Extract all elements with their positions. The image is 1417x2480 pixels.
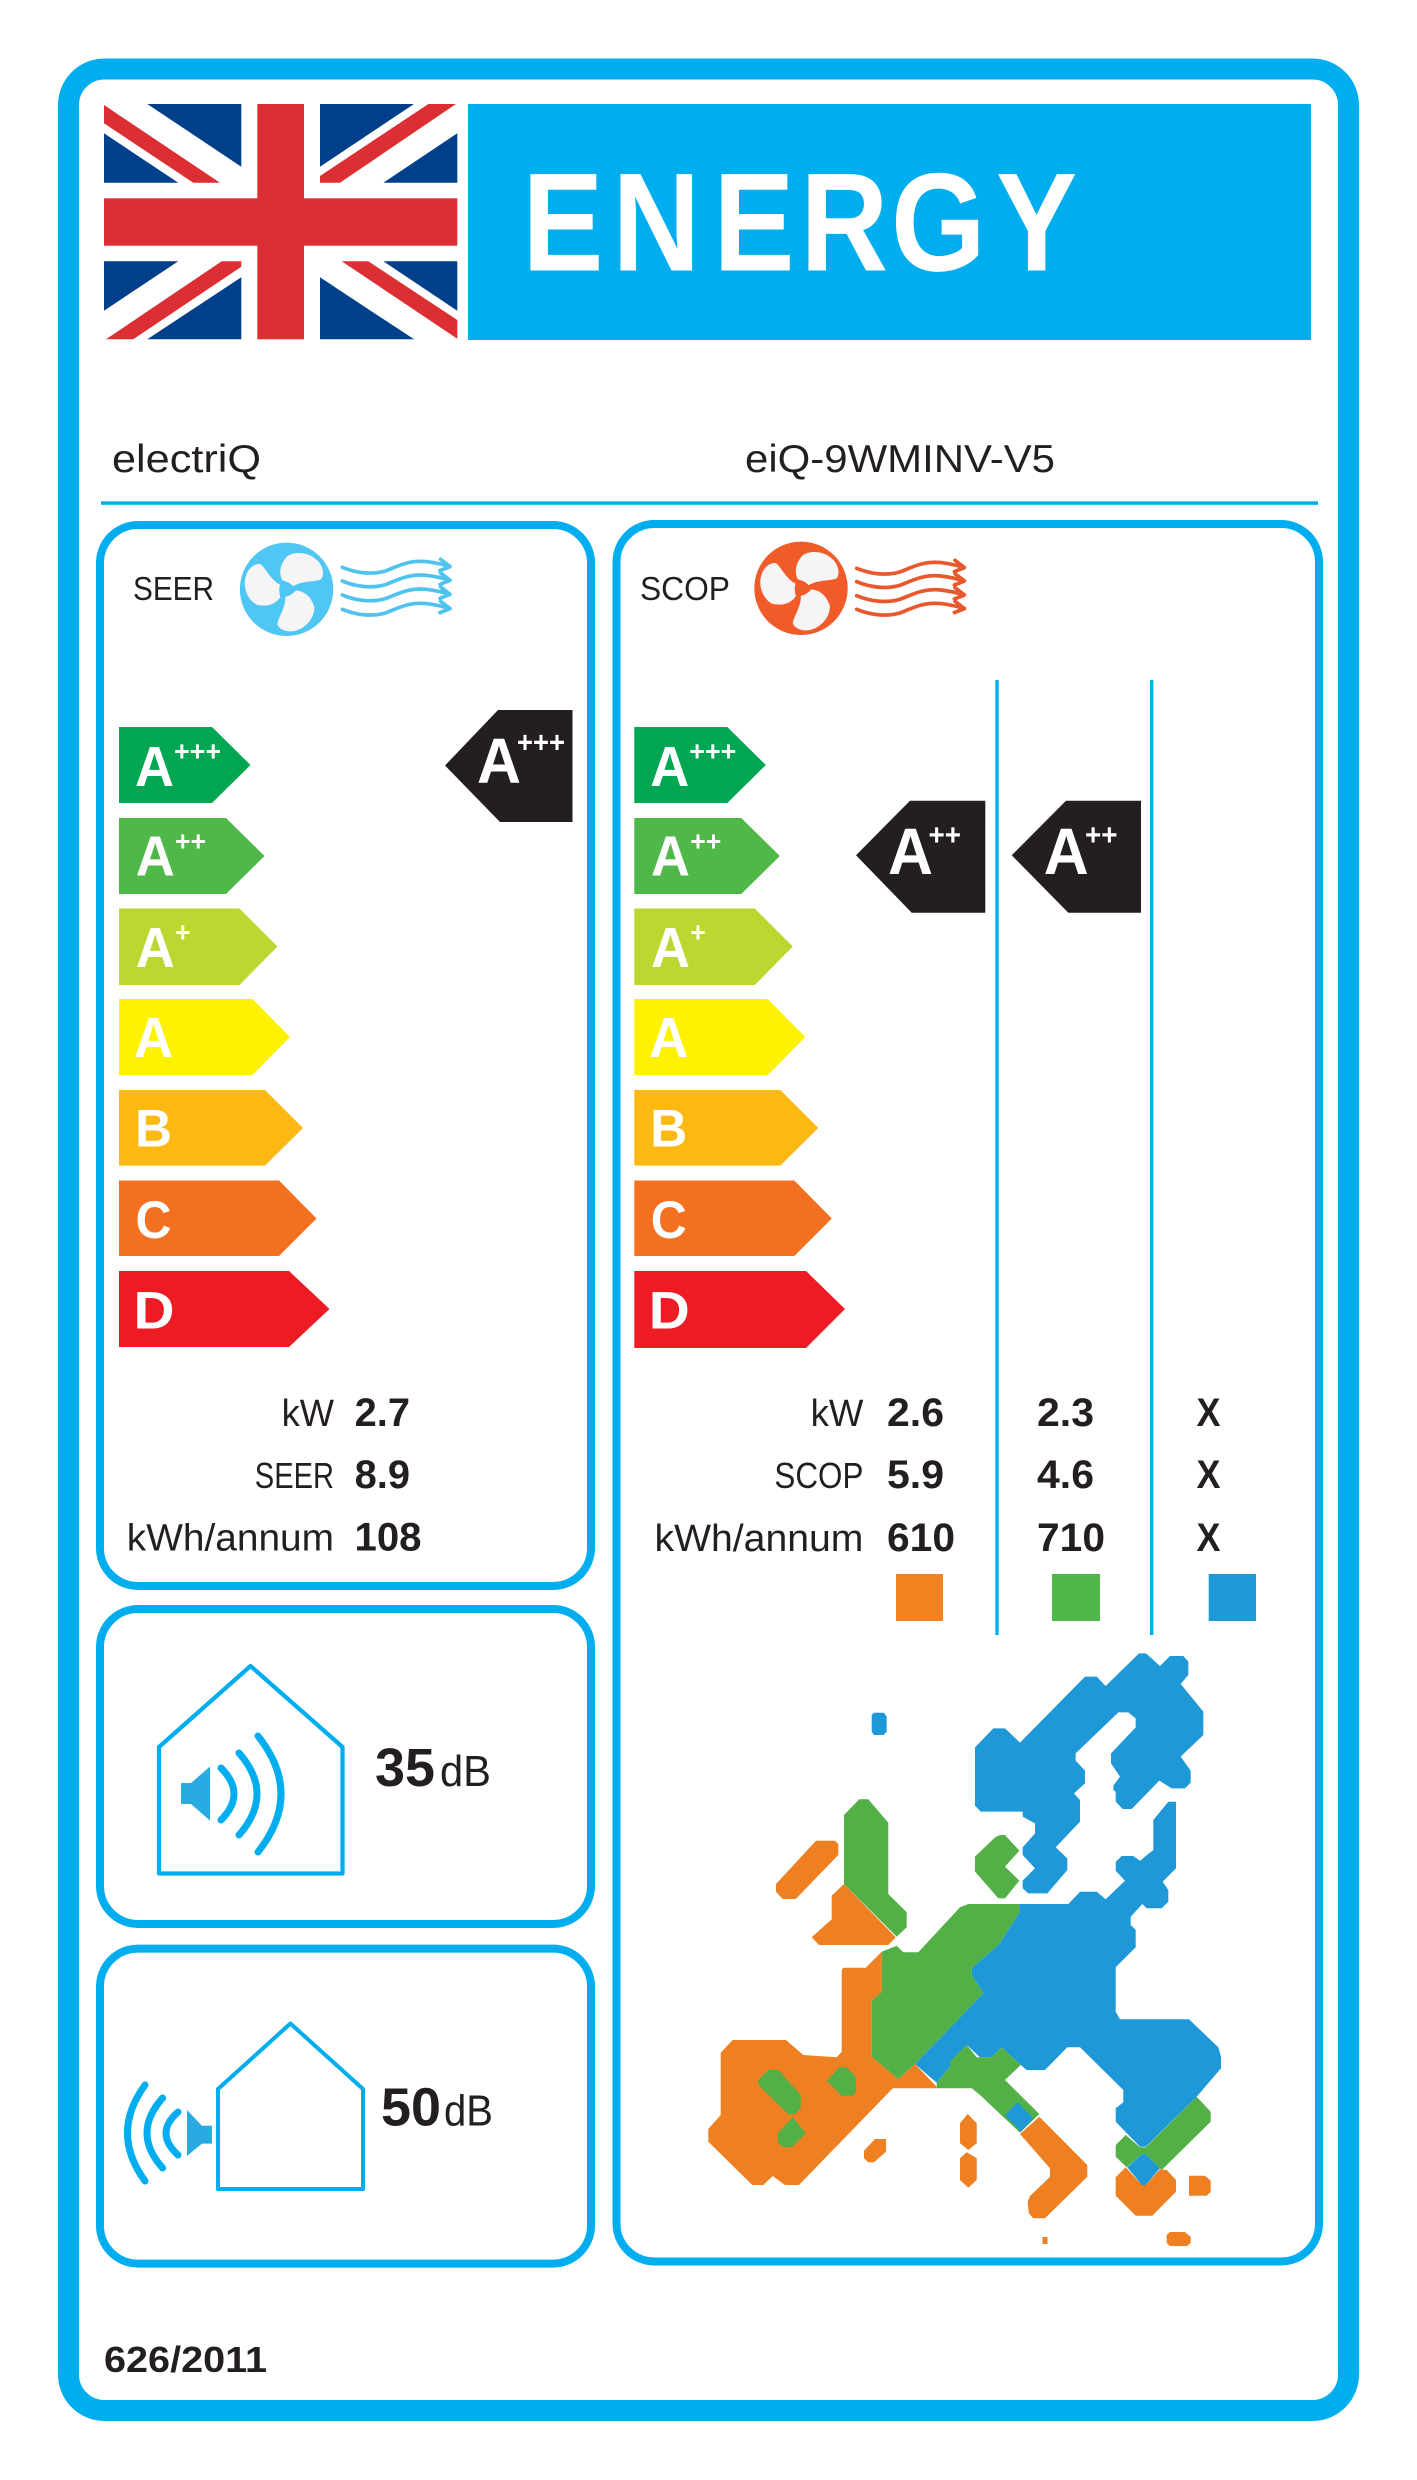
icon: house with outdoor speaker xyxy=(128,2024,363,2189)
icon: heating fan xyxy=(752,542,848,638)
energy scale bars: SEER: A xyxy=(136,916,175,980)
energy scale bars: SCOP: + xyxy=(690,916,706,947)
heating figures: second climate zone: 4.6 xyxy=(1037,1453,1094,1497)
heating figures: third climate zone xyxy=(1196,1391,1256,1621)
energy scale bars: SCOP: ++ xyxy=(690,826,721,857)
rating arrow: A++ colder climate: A xyxy=(888,814,933,888)
rating arrow: A+++ cooling: +++ xyxy=(517,727,565,760)
energy scale bars: SEER: C xyxy=(136,1191,172,1250)
cooling figures: 2.7 xyxy=(355,1391,410,1435)
cooling figures: 108 xyxy=(354,1516,422,1560)
heating figures: first climate zone: 5.9 xyxy=(887,1453,944,1497)
energy scale bars: SCOP: B xyxy=(650,1100,687,1159)
rating arrow: A+++ cooling: A xyxy=(477,725,521,797)
SCOP heading: SCOP xyxy=(640,570,730,607)
regulation number: 626/2011 xyxy=(104,2339,267,2380)
energy scale bars: SCOP: +++ xyxy=(689,736,736,766)
icon: house with indoor speaker xyxy=(159,1666,342,1874)
rating arrow: A++ colder climate xyxy=(856,801,985,913)
energy scale bars: SCOP: A xyxy=(650,735,689,799)
outdoor noise value: 50 xyxy=(381,2078,441,2138)
climate zone map of Europe xyxy=(708,1653,1221,2246)
energy scale bars: SCOP: A xyxy=(651,825,690,889)
energy scale bars: SEER: +++ xyxy=(174,736,221,766)
heating figures: first climate zone xyxy=(887,1391,955,1621)
heating figure labels xyxy=(654,1393,864,1560)
panel: outdoor noise xyxy=(100,1949,591,2264)
energy scale bars: SCOP: D xyxy=(649,1282,690,1341)
energy scale bars: SEER: A xyxy=(134,1006,173,1070)
rating arrow: A+++ cooling xyxy=(445,710,572,822)
icon: cool air waves xyxy=(342,559,450,615)
cooling figures: 8.9 xyxy=(355,1453,410,1497)
heating figures: second climate zone: 2.3 xyxy=(1037,1391,1094,1435)
rating arrow: A++ average climate xyxy=(1012,801,1141,913)
supplier name: electriQ xyxy=(112,438,261,481)
heating figure labels: kWh/annum xyxy=(654,1518,863,1560)
model identifier: eiQ-9WMINV-V5 xyxy=(745,438,1055,481)
heating figure labels: kW xyxy=(811,1393,864,1435)
energy scale bars: SEER: B xyxy=(135,1100,172,1159)
energy scale bars: SEER: + xyxy=(175,916,190,947)
SEER heading: SEER xyxy=(133,570,214,607)
title banner: ENERGY: ENERGY xyxy=(522,144,1077,300)
cooling figures: kWh/annum xyxy=(127,1518,334,1560)
cooling figures: SEER xyxy=(255,1455,334,1496)
heating figures: third climate zone: X xyxy=(1196,1391,1221,1435)
energy scale bars: SCOP: C xyxy=(651,1191,687,1250)
energy scale bars: SCOP: A xyxy=(651,916,690,980)
outdoor noise value: dB xyxy=(444,2087,493,2136)
indoor noise value xyxy=(375,1738,491,1798)
icon: union jack flag xyxy=(104,104,457,339)
panel: indoor noise xyxy=(100,1609,591,1924)
heating figure labels: SCOP xyxy=(774,1455,863,1496)
heating figures: second climate zone xyxy=(1037,1391,1105,1621)
energy scale bars: SEER xyxy=(119,727,330,1347)
heating figures: third climate zone: X xyxy=(1196,1453,1221,1497)
heating figures: first climate zone: 610 xyxy=(887,1516,955,1560)
heating figures: second climate zone: 710 xyxy=(1037,1516,1105,1560)
icon: warm air waves xyxy=(857,560,964,615)
icon: cooling fan xyxy=(236,543,333,639)
panel: SCOP heating xyxy=(616,524,1319,2262)
energy scale bars: SEER: A xyxy=(135,735,174,799)
energy scale bars: SEER: D xyxy=(134,1282,174,1341)
energy scale bars: SEER: ++ xyxy=(175,826,206,857)
rating arrow: A++ average climate: A xyxy=(1044,814,1089,888)
heating figures: first climate zone: 2.6 xyxy=(887,1391,944,1435)
energy scale bars: SEER: A xyxy=(136,825,175,889)
indoor noise value: dB xyxy=(440,1747,491,1796)
energy scale bars: SCOP: A xyxy=(649,1006,688,1070)
heating figures: third climate zone: X xyxy=(1196,1516,1221,1560)
title banner: ENERGY xyxy=(468,104,1311,340)
energy scale bars: SCOP xyxy=(634,727,845,1348)
panel: SEER cooling xyxy=(100,525,591,1586)
rating arrow: A++ average climate: ++ xyxy=(1085,819,1118,852)
indoor noise value: 35 xyxy=(375,1738,435,1798)
cooling figures xyxy=(127,1391,422,1560)
cooling figures: kW xyxy=(282,1393,334,1435)
rating arrow: A++ colder climate: ++ xyxy=(928,819,961,852)
outdoor noise value xyxy=(381,2078,493,2138)
